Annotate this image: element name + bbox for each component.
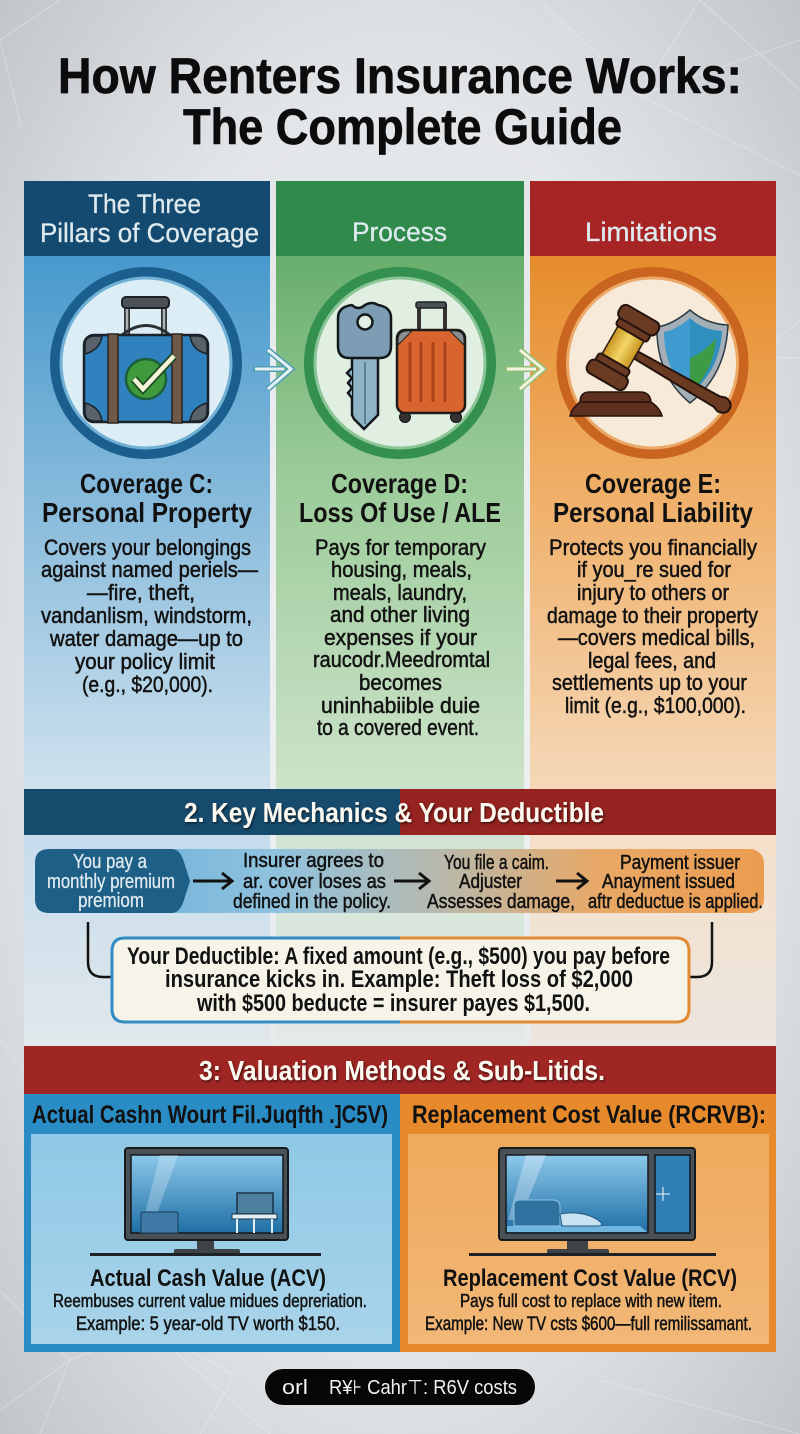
body text: coverage C: (e.g., $20,000). bbox=[82, 672, 213, 697]
step 1: pay premium bbox=[35, 849, 190, 913]
step 3: file a claim: You file a caim. bbox=[444, 852, 549, 874]
step 1: pay premium: premiom bbox=[78, 890, 144, 912]
body text: coverage E bbox=[547, 535, 758, 718]
body text: coverage E: if you_re sued for bbox=[577, 557, 731, 582]
body text: coverage D: and other living bbox=[330, 602, 470, 627]
body text: coverage D: Pays for temporary bbox=[315, 535, 486, 560]
footer pill bbox=[265, 1369, 535, 1405]
body text: coverage C: Covers your belongings bbox=[44, 535, 251, 560]
section 3: valuation methods bbox=[24, 1046, 776, 1352]
body text: coverage D: to a covered event. bbox=[317, 715, 479, 740]
callout: your deductible: insurance kicks in. Example: Theft loss of $2,000 bbox=[165, 966, 633, 993]
panel: actual cash value bbox=[24, 1094, 400, 1352]
panel: coverage D loss of use bbox=[276, 181, 524, 790]
step 2: insurer agrees: defined in the policy. bbox=[233, 891, 391, 913]
section heading band: 2. Key Mechanics & Your Deductible bbox=[184, 797, 604, 828]
step 3: file a claim: Assesses damage, bbox=[427, 891, 575, 913]
body text: coverage D: uninhabiible duie bbox=[321, 693, 480, 718]
step 2: insurer agrees: Insurer agrees to bbox=[243, 850, 384, 872]
text: ACV description: Example: 5 year-old TV worth $150. bbox=[76, 1314, 340, 1335]
column header: limitations bbox=[530, 181, 776, 256]
text: ACV description bbox=[53, 1265, 367, 1335]
text: RCV description: Replacement Cost Value (RCV) bbox=[443, 1265, 737, 1292]
callout: your deductible: with $500 beducte = insurer payes $1,500. bbox=[196, 990, 590, 1017]
step 3: file a claim: Adjuster bbox=[459, 871, 522, 893]
body text: coverage E: limit (e.g., $100,000). bbox=[565, 693, 746, 718]
arrow: step 2 to 3 bbox=[394, 873, 429, 889]
icon: TV showing new sofa bbox=[469, 1148, 716, 1256]
body text: coverage D: housing, meals, bbox=[331, 557, 472, 582]
panel heading: ACV: Actual Cashn Wourt Fil.Juqfth .]C5V) bbox=[32, 1101, 388, 1129]
callout: your deductible bbox=[112, 938, 689, 1022]
body text: coverage D: expenses if your bbox=[324, 625, 477, 650]
title: How Renters Insurance Works: bbox=[58, 48, 742, 104]
step 1: pay premium: You pay a bbox=[73, 851, 148, 873]
footer pill: orl bbox=[282, 1377, 308, 1399]
callout: your deductible: Your Deductible: A fixed amount (e.g., $500) you pay before bbox=[127, 943, 670, 970]
body text: coverage D: raucodr.Meedromtal bbox=[313, 647, 490, 672]
arrow: step 3 to 4 bbox=[556, 873, 587, 889]
step 2: insurer agrees bbox=[233, 850, 391, 913]
step 3: file a claim bbox=[427, 852, 575, 913]
body text: coverage C: against named periels— bbox=[41, 557, 258, 582]
body text: coverage D bbox=[313, 535, 490, 740]
body text: coverage D: meals, laundry, bbox=[333, 580, 467, 605]
body text: coverage C: vandanlism, windstorm, bbox=[41, 603, 252, 628]
arrow: step 1 to 2 bbox=[193, 873, 232, 889]
section heading band: 3: Valuation Methods & Sub-Litids. bbox=[199, 1055, 605, 1086]
heading: coverage E: Personal Liability bbox=[553, 497, 753, 528]
heading: coverage D: Loss Of Use / ALE bbox=[299, 497, 501, 528]
body text: coverage C: water damage—up to bbox=[49, 626, 243, 651]
icon: key and orange suitcase bbox=[309, 272, 491, 454]
step 4: payment issued: Payment issuer bbox=[620, 852, 740, 874]
panel: replacement cost value bbox=[400, 1094, 776, 1352]
process flow strip bbox=[35, 849, 764, 913]
section 2: key mechanics and deductible bbox=[24, 789, 776, 1046]
arrow: pillar one to two bbox=[253, 350, 291, 389]
text: RCV description: Pays full cost to replace with new item. bbox=[460, 1291, 722, 1311]
body text: coverage E: settlements up to your bbox=[552, 670, 747, 695]
step 4: payment issued: aftr deductue is applied. bbox=[588, 891, 763, 913]
body text: coverage E: legal fees, and bbox=[588, 648, 716, 673]
column header: the three pillars of coverage: The Three bbox=[88, 189, 201, 219]
icon: TV showing worn furniture bbox=[90, 1148, 321, 1256]
bracket: left connector bbox=[88, 922, 112, 977]
column header: process bbox=[276, 181, 524, 256]
step 2: insurer agrees: ar. cover loses as bbox=[243, 871, 386, 893]
column header: the three pillars of coverage: Pillars of Coverage bbox=[40, 218, 259, 248]
body text: coverage C: —fire, theft, bbox=[87, 580, 195, 605]
body text: coverage E: Protects you financially bbox=[549, 535, 757, 560]
step 4: payment issued bbox=[588, 852, 763, 913]
heading: coverage C: Personal Property bbox=[42, 497, 252, 528]
panel: coverage C personal property bbox=[24, 181, 270, 790]
icon: gavel and shield bbox=[562, 272, 749, 454]
title: The Complete Guide bbox=[183, 99, 622, 155]
section heading band bbox=[24, 1046, 776, 1094]
body text: coverage C: your policy limit bbox=[75, 649, 215, 674]
body text: coverage C bbox=[41, 535, 258, 697]
column header: process: Process bbox=[352, 217, 447, 247]
heading: coverage E: Coverage E: bbox=[585, 468, 721, 499]
heading: coverage C: Coverage C: bbox=[80, 468, 213, 499]
heading: coverage D bbox=[299, 468, 501, 528]
body text: coverage E: damage to their property bbox=[547, 603, 758, 628]
footer pill: R¥⊦ Cahr⊤: R6V costs bbox=[329, 1377, 517, 1399]
title bbox=[58, 48, 742, 155]
column header: limitations: Limitations bbox=[585, 217, 717, 247]
body text: coverage E: injury to others or bbox=[577, 580, 729, 605]
bracket: right connector bbox=[689, 922, 712, 977]
heading: coverage E bbox=[553, 468, 753, 528]
heading: coverage D: Coverage D: bbox=[331, 468, 468, 499]
section heading band bbox=[24, 789, 776, 835]
text: ACV description: Reembuses current value midues depreriation. bbox=[53, 1291, 367, 1311]
step 1: pay premium: monthly premium bbox=[47, 871, 175, 893]
text: ACV description: Actual Cash Value (ACV) bbox=[90, 1265, 326, 1292]
text: RCV description bbox=[425, 1265, 752, 1335]
heading: coverage C bbox=[42, 468, 252, 528]
column header: the three pillars of coverage bbox=[24, 181, 270, 256]
step 4: payment issued: Anayment issued bbox=[602, 871, 735, 893]
body text: coverage E: —covers medical bills, bbox=[558, 625, 755, 650]
panel: coverage E personal liability bbox=[530, 181, 776, 790]
body text: coverage D: becomes bbox=[359, 670, 442, 695]
icon: suitcase with check mark bbox=[55, 272, 237, 454]
arrow: pillar two to three bbox=[505, 350, 543, 389]
